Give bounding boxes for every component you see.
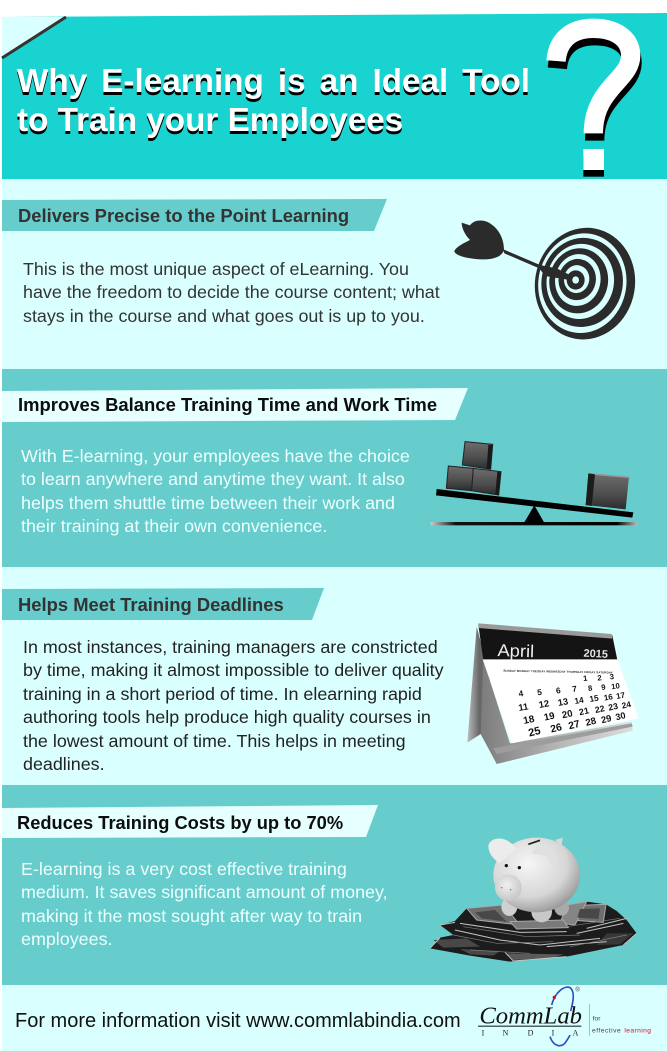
heading banner: reduces costs [2, 805, 378, 838]
icon: question mark [546, 18, 642, 177]
icon: desk calendar April 2015: April [497, 640, 535, 661]
icon: desk calendar April 2015: 8 [587, 683, 594, 693]
icon: desk calendar April 2015: 21 [578, 705, 590, 717]
title [17, 63, 530, 141]
pig [554, 900, 569, 916]
icon: desk calendar April 2015 [467, 623, 638, 764]
icon: dart and target [454, 220, 636, 340]
logo: CommLab India [478, 986, 651, 1046]
icon: desk calendar April 2015: 15 [589, 692, 600, 704]
heading banner: improves balance [2, 388, 468, 422]
logo: CommLab India: I [552, 1028, 555, 1037]
icon: desk calendar April 2015: 4 [518, 688, 524, 699]
icon: desk calendar April 2015: 18 [522, 714, 536, 727]
icon: desk calendar April 2015: 23 [607, 701, 619, 713]
header banner [1, 13, 667, 179]
heading banner: meet deadlines [2, 588, 324, 620]
logo: CommLab India: A [573, 1028, 579, 1037]
icon: desk calendar April 2015: 11 [518, 701, 529, 713]
icon: piggy bank on money [430, 838, 637, 962]
title: to Train your Employees [17, 102, 403, 139]
heading banner: delivers precise learning: Delivers Precise to the Point Learning [18, 205, 349, 226]
body text: deadlines: the lowest amount of time. This helps in meeting [23, 731, 406, 751]
icon: desk calendar April 2015: 29 [600, 713, 613, 725]
icon: desk calendar April 2015: 22 [594, 703, 606, 715]
icon: desk calendar April 2015: SUNDAY MONDAY TUESDAY WEDNESDAY THURSDAY FRIDAY SATURDAY [503, 669, 613, 675]
icon: desk calendar April 2015: 17 [615, 690, 626, 701]
logo: CommLab India: D [528, 1028, 534, 1037]
logo: CommLab India: for [593, 1015, 601, 1022]
icon: balance scale with cubes [430, 441, 638, 526]
icon: desk calendar April 2015: 2 [597, 673, 602, 683]
icon: desk calendar April 2015: 30 [614, 710, 627, 722]
heading banner: improves balance: Improves Balance Training Time and Work Time [18, 394, 437, 415]
icon: desk calendar April 2015: 12 [538, 698, 550, 710]
body text: deadlines [23, 637, 444, 774]
icon: desk calendar April 2015: 27 [567, 719, 581, 732]
panel: precise learning [2, 179, 667, 369]
body text: precise learning: stays in the course and what goes out is up to you. [23, 306, 425, 326]
body text: costs: making it the most sought after way to train [21, 906, 362, 926]
icon: desk calendar April 2015: 13 [557, 696, 569, 708]
icon: desk calendar April 2015: 28 [584, 715, 598, 729]
body text: precise learning: This is the most unique aspect of eLearning. You [23, 259, 409, 279]
logo: CommLab India: CommLab [479, 1003, 582, 1030]
body text: balance time: helps them shuttle time between their work and [21, 493, 395, 513]
icon: desk calendar April 2015: 5 [537, 687, 543, 697]
money pile [430, 902, 637, 962]
body text: balance time: With E-learning, your employees have the choice [21, 446, 410, 466]
logo: CommLab India: learning [624, 1028, 651, 1035]
icon: desk calendar April 2015: 6 [555, 685, 562, 696]
icon: desk calendar April 2015: 20 [561, 708, 574, 721]
body text: costs [21, 859, 388, 949]
icon: desk calendar April 2015: 16 [603, 692, 614, 703]
icon: desk calendar April 2015: 9 [601, 682, 606, 692]
logo: CommLab India: effective [592, 1028, 621, 1035]
body text: balance time [21, 446, 410, 536]
logo: CommLab India: I [482, 1028, 485, 1037]
body text: deadlines: authoring tools help produce high quality courses in [23, 707, 431, 727]
icon: desk calendar April 2015: 26 [549, 722, 563, 736]
panel: footer [2, 985, 667, 1051]
icon: desk calendar April 2015: 2015 [583, 648, 608, 661]
logo: CommLab India: N [503, 1028, 509, 1037]
icon: desk calendar April 2015: 7 [572, 683, 578, 694]
heading banner: meet deadlines: Helps Meet Training Deadlines [18, 594, 284, 615]
body text: costs: medium. It saves significant amount of money, [21, 882, 388, 902]
body text: deadlines: In most instances, training managers are constricted [23, 637, 438, 657]
panel: reduce costs [2, 785, 667, 985]
body text: deadlines: by time, making it almost impossible to deliver quality [23, 660, 444, 680]
panel: training deadlines [2, 567, 667, 785]
icon: desk calendar April 2015: 3 [609, 672, 614, 681]
icon: desk calendar April 2015: 24 [621, 699, 632, 711]
heading banner: delivers precise learning [2, 199, 387, 231]
body text: deadlines: training in a short period of time. In elearning rapid [23, 684, 422, 704]
footer call to action: For more information visit www.commlabindia.com [15, 1010, 461, 1032]
body text: precise learning: have the freedom to decide the course content; what [23, 282, 440, 302]
body text: balance time: to learn anywhere and anytime they want. It also [21, 469, 405, 489]
logo: CommLab India: ® [575, 987, 580, 994]
body text: precise learning [23, 259, 440, 326]
icon: desk calendar April 2015: 10 [611, 681, 620, 691]
panel: balance time [2, 369, 667, 567]
body text: balance time: their training at their own convenience. [21, 516, 327, 536]
icon: desk calendar April 2015: 14 [574, 694, 585, 706]
icon: desk calendar April 2015: 19 [543, 710, 556, 724]
title: Why E-learning is an Ideal Tool [17, 63, 530, 100]
body text: costs: employees. [21, 929, 112, 949]
icon: desk calendar April 2015: 25 [527, 725, 542, 740]
heading banner: reduces costs: Reduces Training Costs by up to 70% [17, 812, 343, 833]
icon: desk calendar April 2015: 1 [583, 674, 589, 683]
body text: costs: E-learning is a very cost effective training [21, 859, 347, 879]
body text: deadlines: deadlines. [23, 754, 105, 774]
